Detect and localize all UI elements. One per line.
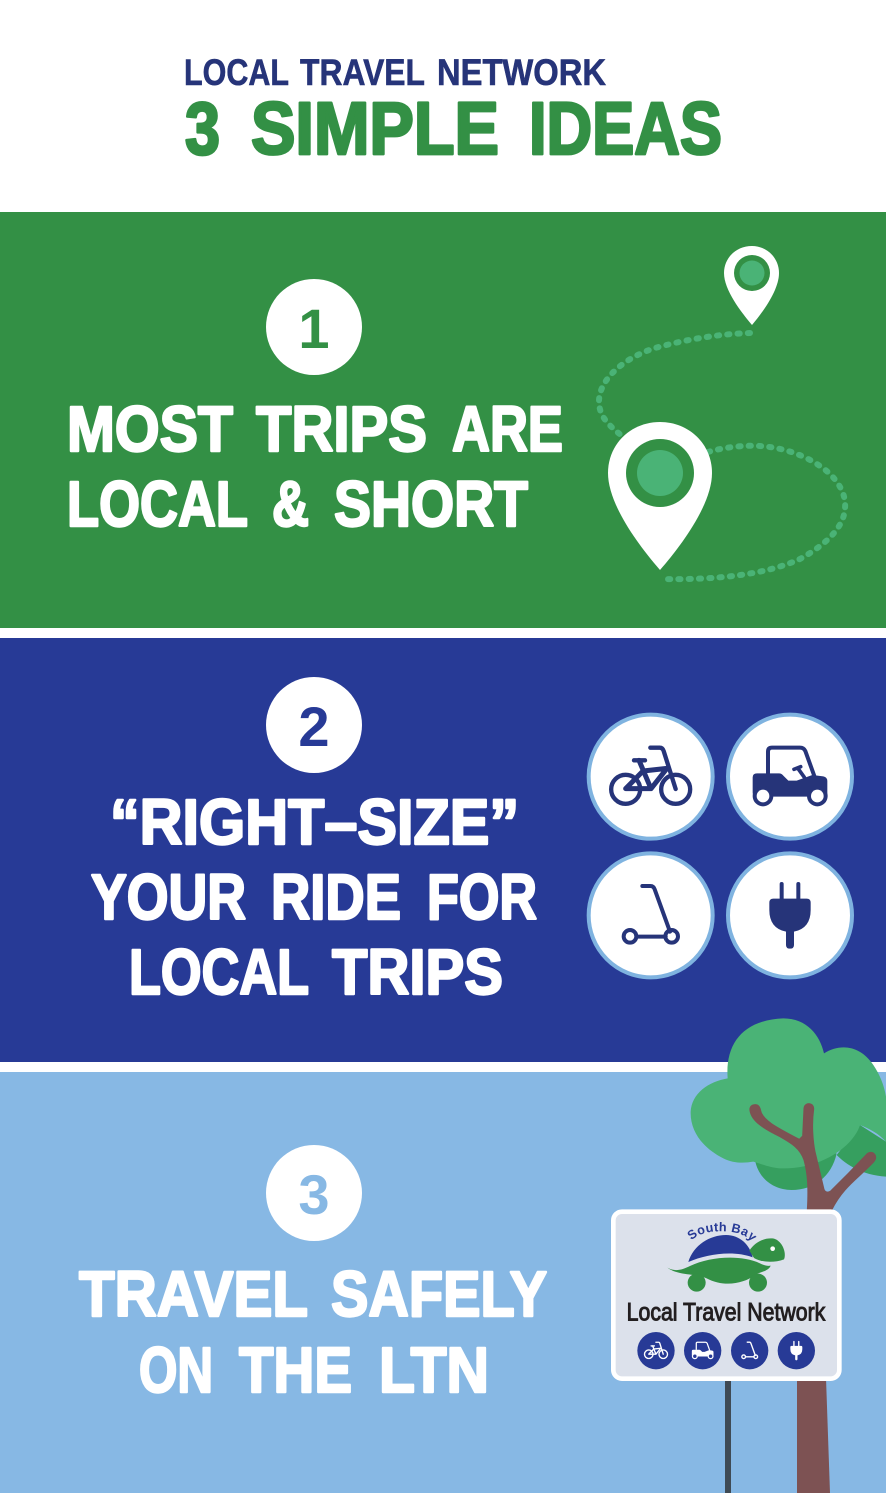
title: 3 Simple Ideas: SIMPLE	[251, 87, 499, 170]
panel background green	[0, 212, 886, 628]
heading: travel safely on the ltn: ON	[139, 1334, 213, 1406]
heading: most trips are local and short: LOCAL	[67, 468, 248, 540]
sign text: Local Travel Network: Local Travel Network	[627, 1299, 826, 1327]
title: Local Travel Network: LOCAL	[184, 52, 289, 93]
title: Local Travel Network: NETWORK	[437, 52, 606, 93]
illustration: tree	[691, 1018, 886, 1210]
icon: electric plug	[728, 853, 852, 977]
heading: most trips are local and short	[67, 393, 563, 540]
number badge 3	[266, 1145, 362, 1241]
logo text: South Bay: South Bay	[688, 1222, 756, 1241]
number badge 1: 1	[298, 297, 330, 360]
heading: most trips are local and short: SHORT	[334, 468, 528, 540]
heading: travel safely on the ltn: SAFELY	[331, 1258, 547, 1330]
icon: golf cart	[728, 715, 852, 839]
heading: right-size your ride for local trips: “RIGHT–SIZE”	[110, 786, 519, 858]
logo: turtle	[667, 1235, 785, 1292]
title: Local Travel Network	[184, 52, 606, 93]
icon: kick scooter	[589, 853, 713, 977]
panel: idea 2	[0, 638, 886, 1062]
heading: travel safely on the ltn: THE	[239, 1334, 352, 1406]
icon: large map pin	[608, 422, 712, 570]
heading: most trips are local and short: &	[272, 468, 309, 540]
title: 3 Simple Ideas: IDEAS	[529, 87, 722, 170]
title: 3 Simple Ideas: 3	[185, 87, 220, 170]
panel: idea 1	[0, 212, 886, 628]
title: Local Travel Network: TRAVEL	[300, 52, 425, 93]
heading: most trips are local and short: ARE	[452, 393, 563, 465]
heading: travel safely on the ltn: LTN	[379, 1334, 489, 1406]
number badge 3: 3	[298, 1163, 330, 1226]
heading: most trips are local and short: TRIPS	[256, 393, 427, 465]
heading: right-size your ride for local trips: FOR	[427, 861, 537, 933]
heading: right-size your ride for local trips: LOCAL	[129, 936, 309, 1008]
heading: most trips are local and short: MOST	[67, 393, 233, 465]
sign board	[613, 1212, 839, 1379]
heading: right-size your ride for local trips: TRIPS	[332, 936, 503, 1008]
heading: travel safely on the ltn: TRAVEL	[79, 1258, 308, 1330]
icon grid: vehicles	[589, 715, 852, 977]
icon: bicycle	[589, 715, 713, 839]
panel: idea 3	[0, 1018, 886, 1493]
panel background blue	[0, 638, 886, 1062]
heading: right-size your ride for local trips: YOUR	[91, 861, 246, 933]
sign icon: golf cart	[684, 1332, 721, 1369]
title: 3 Simple Ideas	[185, 87, 722, 170]
number badge 1	[266, 279, 362, 375]
tree trunk lower	[797, 1378, 830, 1493]
heading: right-size your ride for local trips: RIDE	[271, 861, 401, 933]
sign icon: bicycle	[637, 1332, 675, 1369]
sign post	[725, 1378, 731, 1493]
heading: right-size your ride for local trips	[91, 786, 537, 1008]
sign icon: plug	[778, 1332, 815, 1369]
dotted route	[599, 333, 845, 579]
icon: small map pin	[724, 246, 779, 325]
panel background light blue	[0, 1072, 886, 1493]
number badge 2	[266, 677, 362, 773]
road sign	[611, 1209, 842, 1381]
sign icon: scooter	[731, 1332, 768, 1369]
number badge 2: 2	[298, 695, 330, 758]
heading: travel safely on the ltn	[79, 1258, 547, 1406]
title block	[184, 52, 722, 170]
